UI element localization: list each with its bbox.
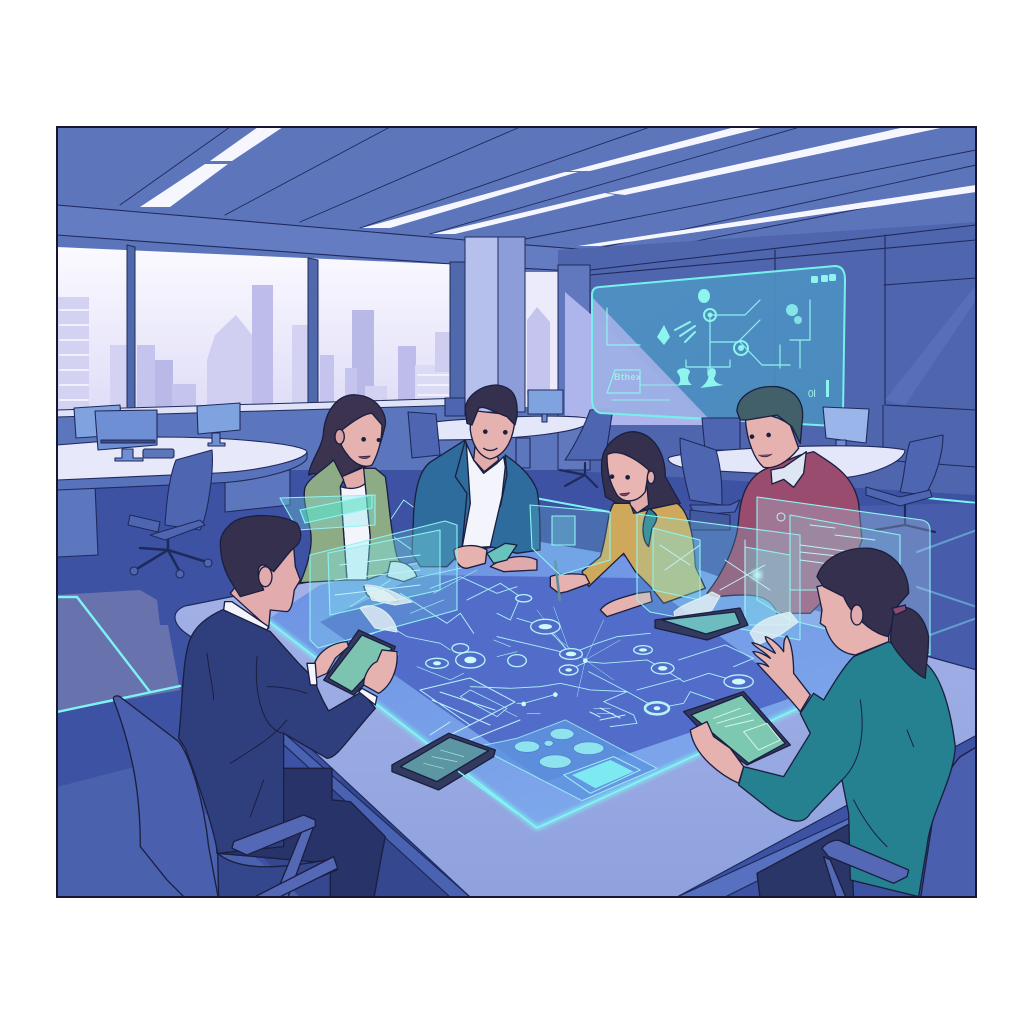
panel: centre screen bbox=[530, 505, 610, 575]
background desk: left bbox=[57, 403, 307, 578]
person: man in maroon sweater bbox=[707, 387, 862, 613]
holographic wall display: 0l bbox=[808, 389, 816, 400]
ceiling light strips bbox=[140, 127, 976, 246]
holographic hands bbox=[360, 585, 798, 645]
windows with city skyline bbox=[57, 245, 558, 417]
holographic map on table bbox=[267, 497, 930, 828]
map data panel bbox=[477, 720, 657, 801]
tablet on table: front bbox=[392, 733, 517, 813]
illustration: team around a holographic table bbox=[56, 126, 977, 898]
holographic wall display bbox=[592, 266, 845, 426]
conference table bbox=[175, 540, 977, 897]
tablet on table: centre bbox=[655, 608, 748, 640]
person: woman in teal shirt (front right) bbox=[684, 548, 977, 900]
panel: yellow person screen bbox=[637, 514, 800, 640]
map network in local coordinates bbox=[337, 497, 754, 727]
background desk: right bbox=[668, 407, 943, 532]
panel: right information screen bbox=[757, 497, 930, 655]
person: woman in yellow sweater bbox=[550, 432, 705, 617]
background desk: center bbox=[408, 390, 613, 487]
back wall and floor base bbox=[57, 400, 976, 900]
chair armrest bbox=[232, 815, 338, 900]
chair: front left bbox=[113, 696, 219, 900]
holo label text: Bthex bbox=[614, 372, 642, 382]
small right window bbox=[525, 272, 558, 407]
person: woman in green blazer bbox=[300, 395, 417, 602]
ceiling bbox=[57, 127, 976, 277]
person: man in navy suit (front left) bbox=[113, 516, 397, 900]
image frame bbox=[57, 127, 976, 897]
left wall header beam bbox=[57, 205, 590, 272]
chair: front right bbox=[920, 747, 977, 900]
floating holographic panels bbox=[280, 495, 930, 655]
skyline buildings bbox=[57, 285, 450, 412]
right wall panels bbox=[558, 222, 976, 495]
panel: left data screens bbox=[280, 495, 930, 655]
pillar bbox=[465, 237, 525, 412]
person: man in blue blazer bbox=[412, 385, 540, 572]
chair: left background bbox=[165, 450, 212, 530]
floor panels and light lines bbox=[57, 497, 977, 712]
monitors bbox=[74, 405, 122, 438]
